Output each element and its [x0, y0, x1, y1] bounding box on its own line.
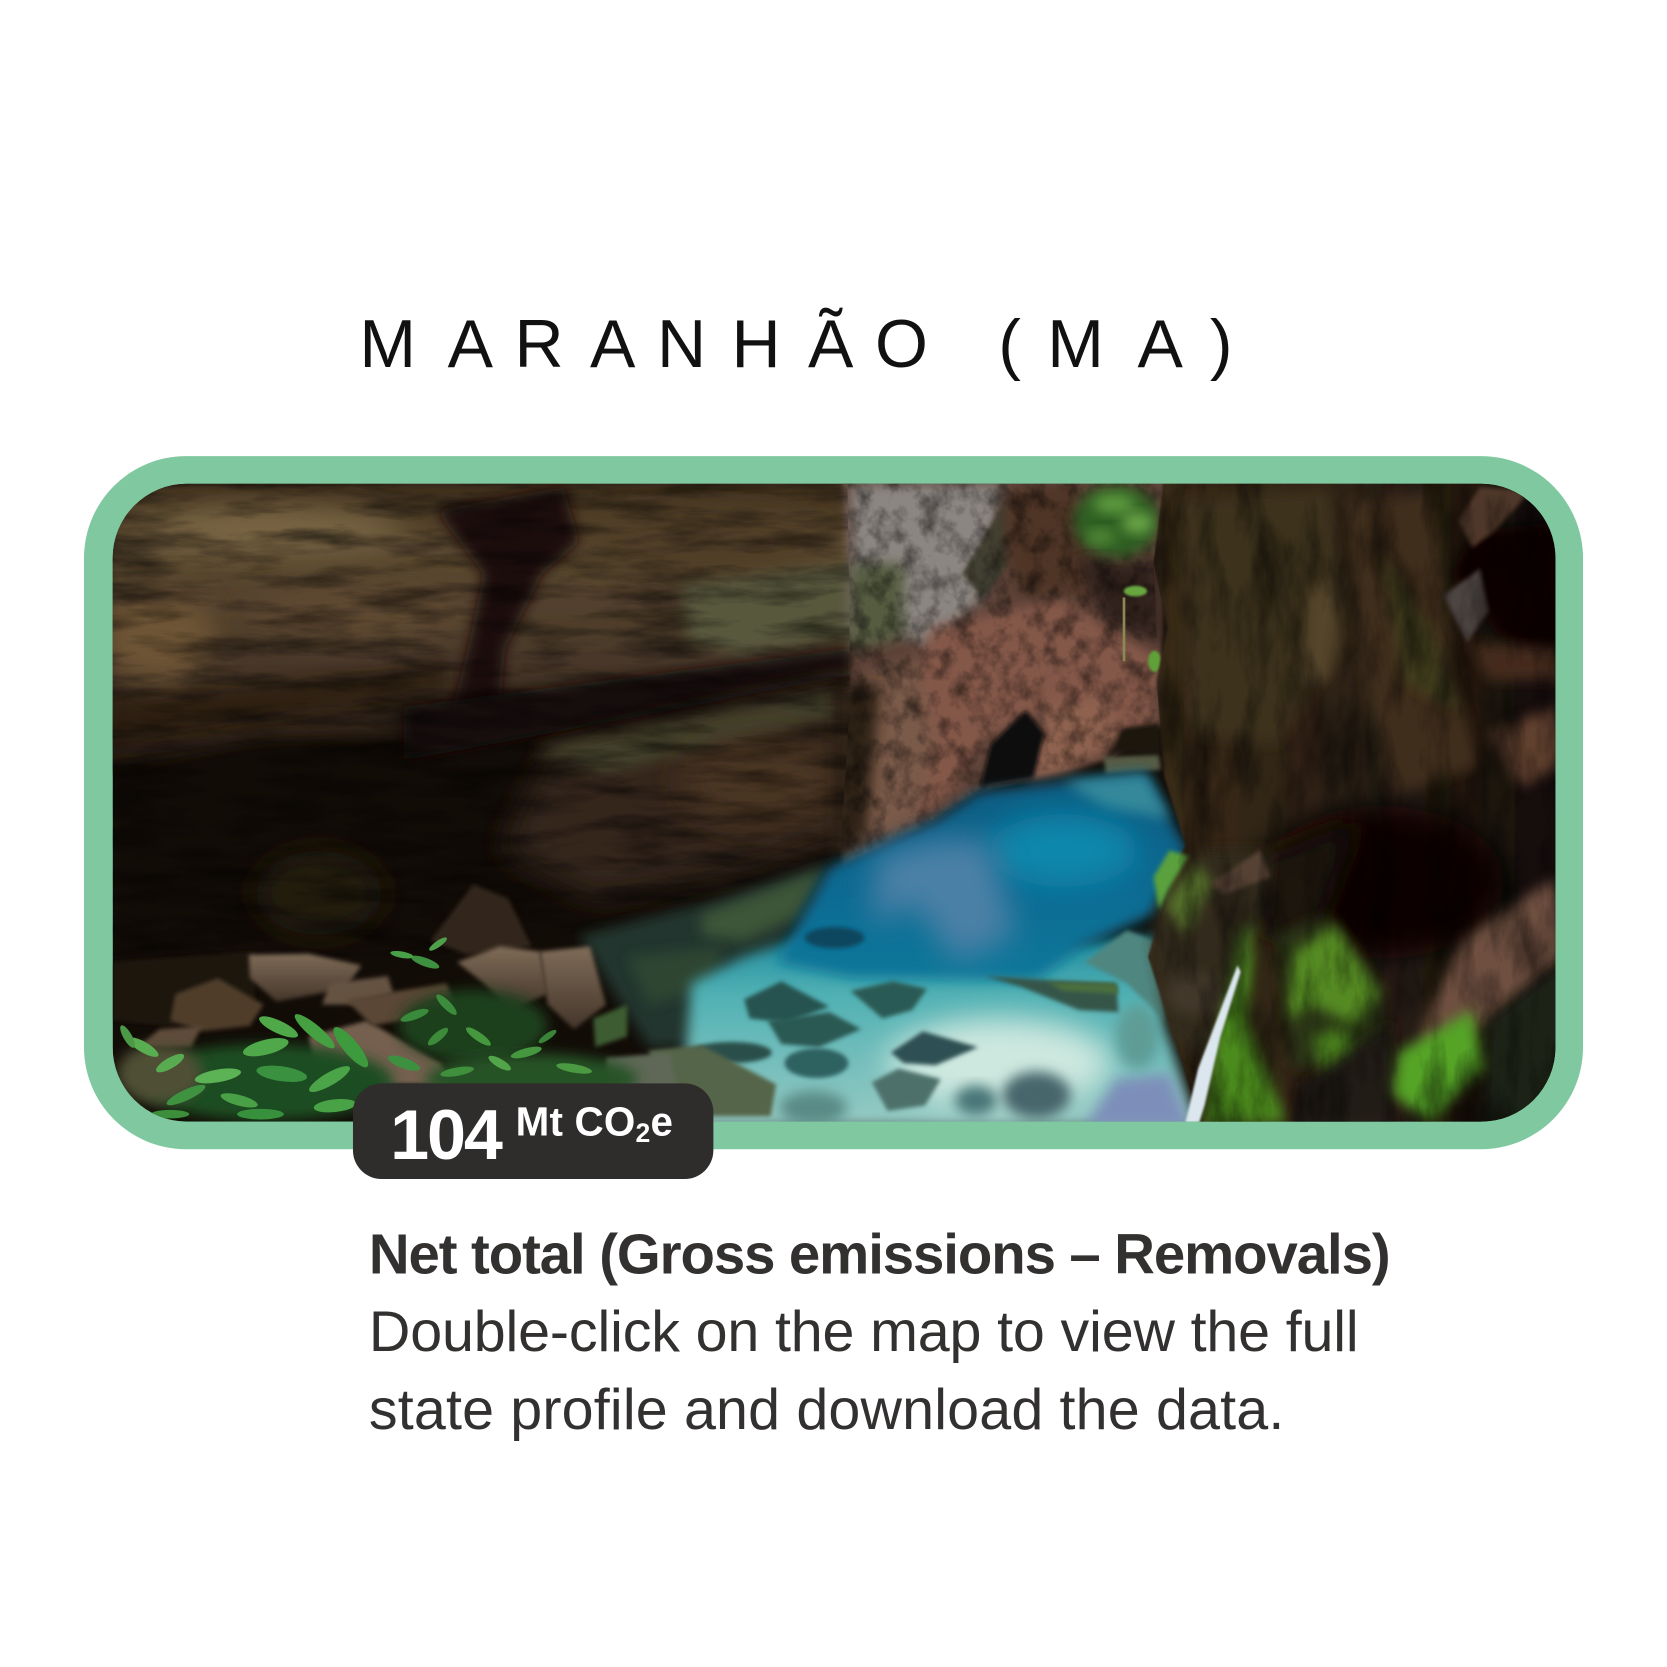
instruction line 1: Double-click on the map to view the full — [369, 1300, 1359, 1364]
right canyon wall — [1148, 478, 1563, 1127]
submerged rocks — [691, 927, 1118, 1125]
unit: e — [650, 1098, 673, 1144]
unit: Mt CO — [516, 1098, 635, 1144]
left cave wall upper — [101, 478, 861, 771]
unit: 2 — [636, 1118, 650, 1148]
emissions badge — [353, 1083, 713, 1179]
texture: vertical rock grain — [1148, 478, 1563, 1127]
water: shelf, deep pool, shallows — [579, 773, 1196, 1127]
green frame — [84, 456, 1583, 1149]
photo: cave with turquoise water — [101, 478, 1563, 1127]
cave mouths — [980, 710, 1161, 787]
texture: rock strata — [106, 478, 1169, 957]
value: 104 — [390, 1095, 503, 1174]
jungle foliage at top of gorge — [1074, 485, 1161, 672]
title: MARANHÃO (MA) — [359, 306, 1233, 382]
foreground boulders — [113, 885, 776, 1116]
instruction line 2: state profile and download the data. — [369, 1378, 1284, 1442]
heading: net total: Net total (Gross emissions – Removals) — [369, 1223, 1391, 1286]
foreground foliage — [117, 935, 638, 1121]
left cave wall lower — [255, 680, 851, 936]
central sunlit cliff — [835, 478, 1165, 866]
description text — [369, 1223, 1391, 1442]
waterfall — [1185, 965, 1241, 1123]
